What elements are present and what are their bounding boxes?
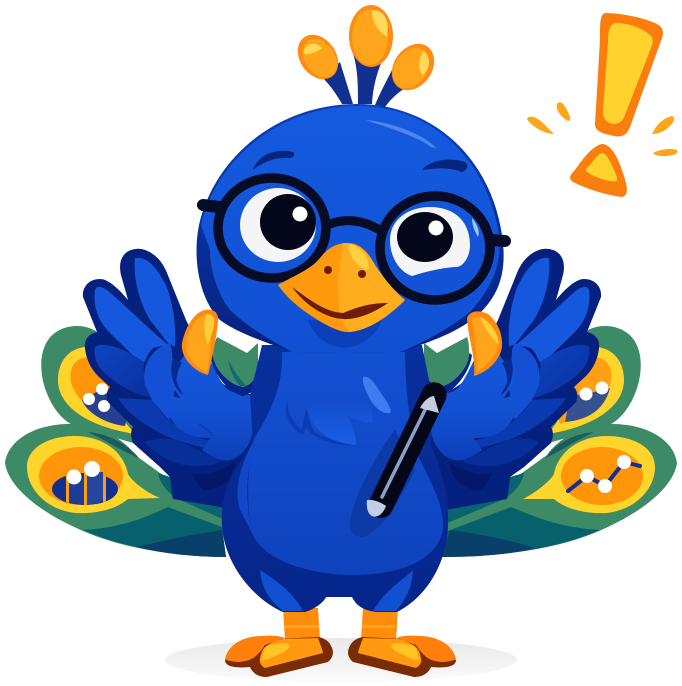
right green feather	[424, 337, 469, 387]
exclamation mark	[527, 13, 677, 197]
pen shaft highlight	[382, 410, 425, 497]
right outer toe	[396, 636, 456, 662]
exclamation bar	[595, 13, 663, 136]
crest	[289, 5, 443, 107]
right eye	[390, 207, 479, 276]
left tail fan	[5, 326, 226, 557]
eyebrows	[253, 151, 294, 170]
belly side accent	[238, 432, 258, 533]
crest center plume	[349, 5, 393, 67]
left green feather	[213, 337, 258, 387]
body	[222, 345, 448, 612]
ground shadow	[165, 638, 517, 682]
pen tip	[420, 396, 439, 413]
belly	[248, 352, 443, 575]
pen shadow	[350, 430, 415, 537]
crest left plume	[289, 27, 347, 87]
crest stems	[322, 50, 407, 107]
right claw	[467, 311, 502, 376]
left feather edge	[210, 353, 262, 396]
chest tufts light	[307, 400, 373, 445]
chin shadow	[308, 320, 382, 348]
left outer toe	[225, 636, 285, 662]
head highlight	[366, 120, 436, 148]
left hand crease	[171, 358, 183, 395]
left wing	[83, 249, 264, 512]
head	[197, 104, 505, 353]
glasses	[203, 178, 505, 300]
right tail fan	[442, 326, 677, 557]
mouth	[292, 287, 388, 319]
chest tufts dark	[286, 400, 353, 445]
left foot base	[225, 637, 333, 677]
left claw	[182, 310, 218, 375]
right foot highlight	[391, 643, 419, 660]
pen cap	[367, 500, 386, 517]
right feather edge	[420, 353, 472, 396]
legs and feet	[225, 608, 456, 677]
beak	[278, 243, 405, 332]
right leg	[348, 608, 456, 677]
left foot highlight	[262, 643, 290, 660]
exclamation dot	[570, 144, 627, 197]
left inner foot	[260, 638, 323, 668]
pen	[350, 378, 451, 537]
bottom feather accents	[260, 570, 303, 611]
left leg	[225, 608, 333, 677]
crest right plume	[383, 36, 443, 98]
right inner foot	[358, 638, 421, 668]
left eye	[240, 188, 316, 262]
right hand crease	[501, 358, 513, 395]
right wing	[420, 249, 601, 512]
right foot base	[348, 637, 456, 677]
chest highlight	[363, 377, 391, 413]
pen barrel	[364, 378, 451, 522]
spark lines	[527, 102, 677, 156]
left feather mark	[228, 360, 246, 387]
green feathers behind shoulders	[210, 337, 472, 396]
